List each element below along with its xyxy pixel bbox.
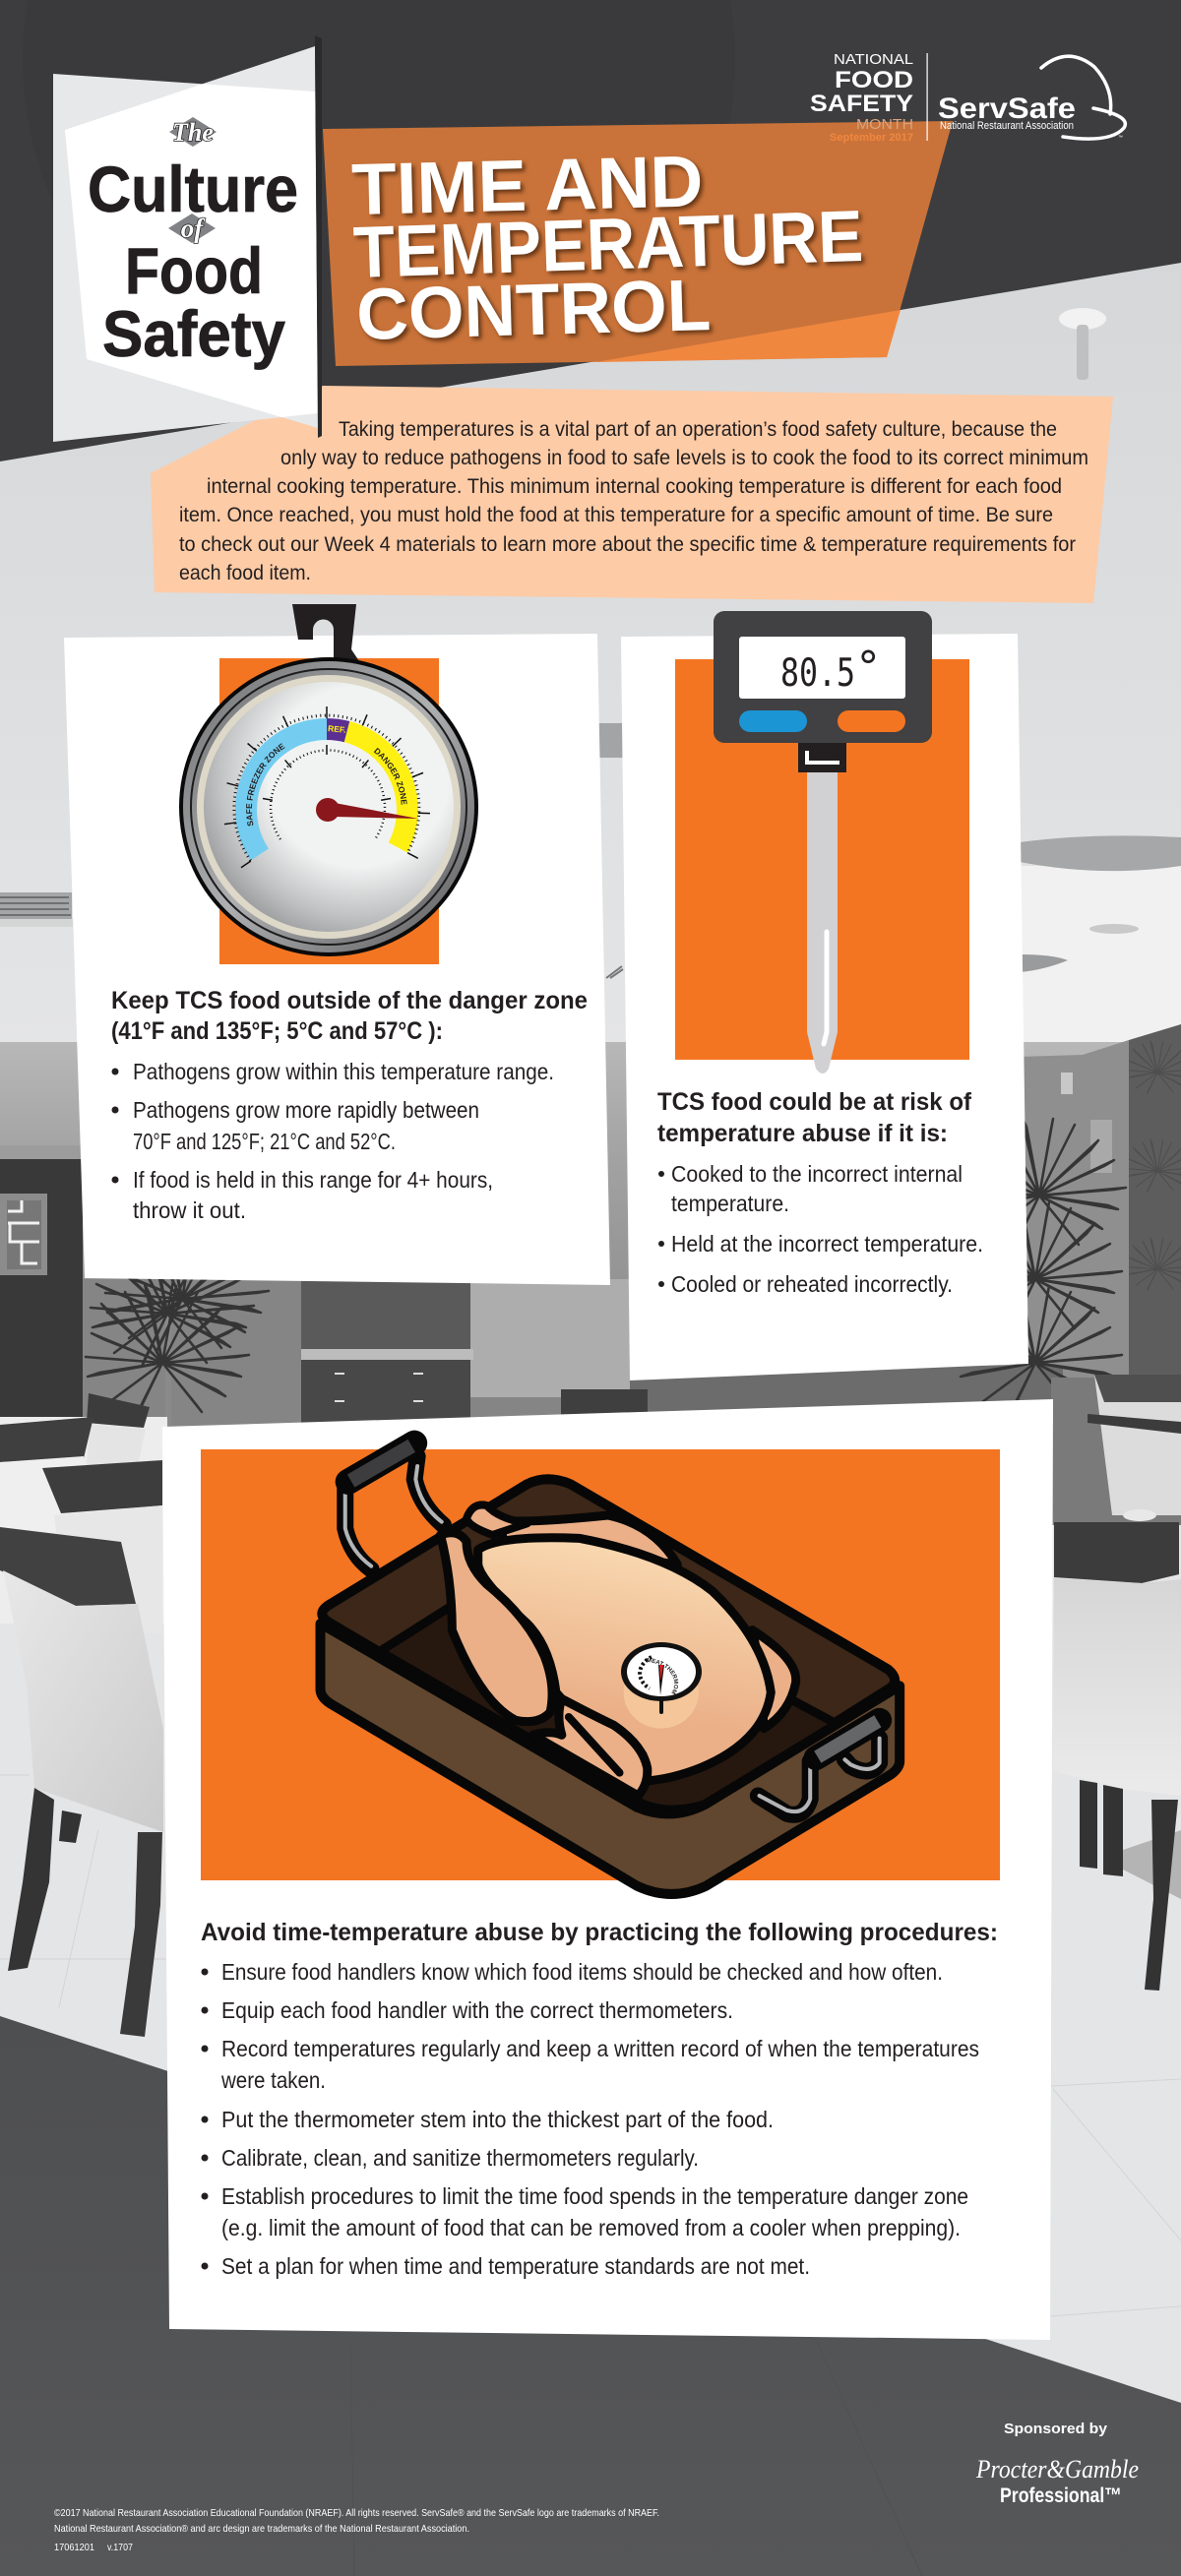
near wing bbox=[532, 1699, 648, 1796]
orange backdrop bbox=[675, 659, 969, 1060]
card 3 bullet list: Set a plan for when time and temperature standards are not met. bbox=[221, 2253, 810, 2279]
back handle bbox=[345, 1443, 444, 1569]
neck bbox=[798, 743, 846, 772]
card 2 bullet list bbox=[658, 1161, 983, 1297]
ref arc bbox=[327, 718, 349, 742]
safe freezer zone arc bbox=[235, 718, 327, 860]
card 3 bullet list: Equip each food handler with the correct thermometers. bbox=[221, 1997, 733, 2023]
diamond: of bbox=[168, 214, 216, 243]
card 1 bullet list: If food is held in this range for 4+ hours, bbox=[133, 1167, 493, 1193]
probe stem bbox=[807, 772, 838, 1073]
intro text panel: only way to reduce pathogens in food to safe levels is to cook the food to its correct minimum bbox=[280, 446, 1088, 469]
reading: ° bbox=[855, 643, 882, 693]
title line 2: TEMPERATURE bbox=[352, 195, 864, 293]
diamond: The: The bbox=[172, 118, 214, 147]
card 3 bullet list bbox=[201, 1959, 979, 2279]
device body bbox=[714, 611, 932, 743]
card 3 heading: Avoid time-temperature abuse by practicing the following procedures: bbox=[201, 1919, 998, 1946]
flag pole bbox=[315, 35, 322, 438]
hook bbox=[292, 604, 359, 661]
copyright footer: v.1707 bbox=[107, 2543, 133, 2553]
chicken neck knob bbox=[466, 1504, 528, 1535]
intro text panel: Taking temperatures is a vital part of an operation’s food safety culture, because the bbox=[339, 417, 1057, 441]
chicken far wing bbox=[753, 1630, 796, 1729]
sponsor block bbox=[975, 2421, 1139, 2507]
card 1 bullet list: throw it out. bbox=[133, 1197, 246, 1223]
icon: dial thermometer bbox=[179, 604, 478, 956]
wall art bbox=[0, 1194, 47, 1275]
danger zone arc bbox=[344, 721, 418, 852]
intro text panel: item. Once reached, you must hold the food at this temperature for a specific amount of time. Be sure bbox=[179, 503, 1053, 526]
card 2 heading bbox=[657, 1088, 972, 1147]
cabinet bbox=[301, 1279, 473, 1429]
chicken back lobe bbox=[498, 1515, 677, 1564]
diamond: of: of bbox=[181, 214, 206, 243]
card 1 bullet list: 70°F and 125°F; 21°C and 52°C. bbox=[133, 1129, 396, 1154]
card 1 heading: Keep TCS food outside of the danger zone bbox=[111, 987, 588, 1014]
card 3 bullet list: Put the thermometer stem into the thickest part of the food. bbox=[221, 2107, 774, 2132]
sponsor block: Sponsored by bbox=[1004, 2421, 1108, 2437]
orange button bbox=[838, 710, 905, 732]
logo: National Food Safety Month / ServSafe bbox=[810, 51, 1125, 144]
pan front wall bbox=[321, 1624, 900, 1894]
logo: National Food Safety Month / ServSafe: National Restaurant Association bbox=[940, 120, 1074, 132]
title line 3: CONTROL bbox=[355, 264, 712, 355]
card 2 bullet list: Held at the incorrect temperature. bbox=[671, 1231, 983, 1257]
safe freezer zone arc: SAFE FREEZER ZONE bbox=[246, 743, 285, 827]
logo: National Food Safety Month / ServSafe: ™ bbox=[1118, 135, 1123, 141]
panel: temperature abuse card bbox=[621, 611, 1028, 1380]
title panel bbox=[323, 121, 953, 366]
card 3 bullet list: Ensure food handlers know which food items should be checked and how often. bbox=[221, 1959, 943, 1985]
pan floor bbox=[380, 1558, 839, 1809]
card 1 bullet list: Pathogens grow within this temperature range. bbox=[133, 1059, 554, 1084]
blue button bbox=[739, 710, 807, 732]
display bbox=[739, 637, 905, 699]
logo: National Food Safety Month / ServSafe: ServSafe bbox=[938, 92, 1076, 125]
card 3 bullet list: Calibrate, clean, and sanitize thermometers regularly. bbox=[221, 2145, 699, 2171]
drumstick bbox=[441, 1533, 552, 1722]
plant right bbox=[959, 1117, 1126, 1416]
sprinkler bbox=[1059, 308, 1106, 380]
logo: National Food Safety Month / ServSafe: NATIONAL bbox=[834, 51, 913, 68]
right chairs bbox=[1051, 1375, 1181, 1991]
logo: National Food Safety Month / ServSafe: MONTH bbox=[856, 116, 913, 133]
logo: National Food Safety Month / ServSafe: SAFETY bbox=[810, 91, 913, 117]
intro text panel: internal cooking temperature. This minimum internal cooking temperature is different for each food bbox=[207, 474, 1062, 498]
intro text panel: each food item. bbox=[179, 561, 311, 584]
card 2 heading: temperature abuse if it is: bbox=[657, 1120, 948, 1147]
card 3 bullet list: were taken. bbox=[220, 2067, 326, 2093]
card 3 bullet list: Record temperatures regularly and keep a written record of when the temperatures bbox=[221, 2036, 979, 2061]
sponsor block: Procter&Gamble bbox=[975, 2455, 1139, 2484]
meat thermometer gauge: MEAT THERMOMETER bbox=[648, 1657, 679, 1694]
logo: National Food Safety Month / ServSafe: FOOD bbox=[835, 67, 913, 93]
copyright footer bbox=[54, 2507, 659, 2553]
card 2 bullet list: Cooked to the incorrect internal bbox=[671, 1161, 963, 1187]
chicken body bbox=[478, 1538, 771, 1781]
plant left bbox=[86, 1220, 269, 1427]
card 2 heading: TCS food could be at risk of bbox=[657, 1088, 972, 1116]
left chairs bbox=[0, 1393, 163, 2037]
card 3 bullet list: Establish procedures to limit the time food spends in the temperature danger zone bbox=[221, 2183, 968, 2209]
card 2 bullet list: temperature. bbox=[671, 1191, 789, 1216]
copyright footer: ©2017 National Restaurant Association Educational Foundation (NRAEF). All rights reserved. ServSafe® and the ServSafe logo are trademarks of NRAEF. bbox=[54, 2507, 659, 2519]
meat thermometer gauge bbox=[621, 1642, 702, 1714]
ref arc: REF. bbox=[328, 723, 346, 735]
title line 1: TIME AND bbox=[350, 140, 704, 230]
word: Culture: Culture bbox=[88, 153, 298, 225]
flag: The Culture of Food Safety bbox=[53, 35, 322, 442]
reading: 80.5 bbox=[780, 651, 855, 696]
card 1 bullet list bbox=[112, 1059, 554, 1223]
word: Food: Food bbox=[125, 234, 263, 307]
card 1 bullet list: Pathogens grow more rapidly between bbox=[133, 1097, 479, 1123]
dark top band bbox=[0, 0, 1181, 461]
front handle bbox=[758, 1720, 880, 1814]
intro text panel bbox=[151, 386, 1113, 603]
danger zone arc: DANGER ZONE bbox=[374, 748, 407, 805]
pan rim and interior bbox=[322, 1479, 895, 1813]
sponsor block: Professional™ bbox=[1000, 2484, 1122, 2507]
card 3 bullet list: (e.g. limit the amount of food that can be removed from a cooler when prepping). bbox=[221, 2215, 961, 2240]
orange backdrop bbox=[219, 658, 439, 964]
word: Safety: Safety bbox=[102, 297, 285, 370]
panel: danger zone card bbox=[64, 604, 610, 1285]
copyright footer: National Restaurant Association® and arc design are trademarks of the National Restaurant Association. bbox=[54, 2523, 469, 2535]
dark floor band bbox=[0, 2016, 1181, 2576]
intro text panel: to check out our Week 4 materials to learn more about the specific time & temperature requirements for bbox=[179, 532, 1076, 556]
card 1 heading bbox=[111, 987, 588, 1045]
thermometer glow bbox=[624, 1656, 699, 1729]
icon: roast chicken in pan bbox=[315, 1431, 905, 1899]
needle bbox=[316, 798, 418, 822]
logo: National Food Safety Month / ServSafe: September 2017 bbox=[830, 132, 913, 144]
icon: digital thermometer bbox=[714, 611, 932, 1073]
orange backdrop bbox=[201, 1449, 1000, 1880]
copyright footer: 17061201 bbox=[54, 2543, 94, 2553]
floor bbox=[0, 1515, 1181, 2576]
card 2 bullet list: Cooled or reheated incorrectly. bbox=[671, 1271, 953, 1297]
card 1 heading: (41°F and 135°F; 5°C and 57°C ): bbox=[111, 1017, 443, 1045]
